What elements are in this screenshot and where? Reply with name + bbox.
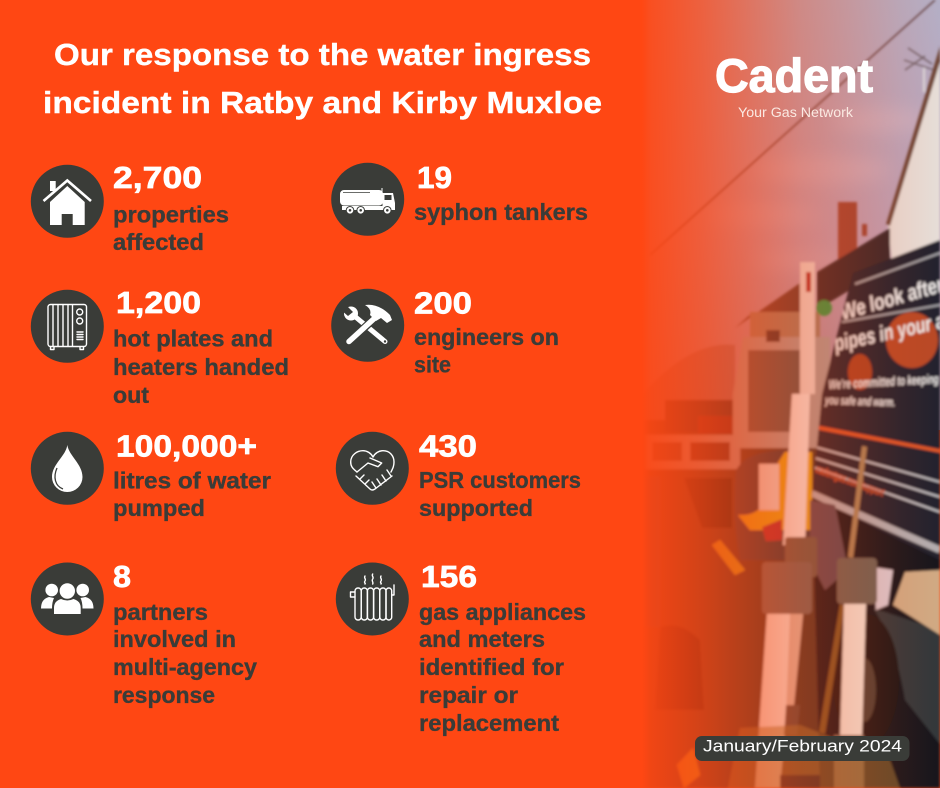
stat: hot plates and heaters: out xyxy=(113,382,149,408)
stat: syphon tankers: 19 xyxy=(417,160,452,195)
stat: gas appliances and meters: 156 xyxy=(421,559,477,594)
stat: properties affected: affected xyxy=(113,229,204,255)
logo: Cadent: Cadent xyxy=(715,49,873,102)
stat: syphon tankers xyxy=(331,160,588,236)
stat: hot plates and heaters xyxy=(31,285,289,408)
stat: litres of water pumped xyxy=(31,429,271,521)
icon: tanker lorry xyxy=(331,163,404,236)
stat: partners involved: response xyxy=(113,682,215,708)
stat: hot plates and heaters: heaters handed xyxy=(113,354,289,380)
stat: engineers on site: site xyxy=(414,352,451,378)
stat: engineers on site: engineers on xyxy=(414,324,559,350)
stat: gas appliances and meters: and meters xyxy=(419,626,545,652)
stat: litres of water pumped: 100,000+ xyxy=(116,429,257,464)
van lettering: cadentgas.com/support xyxy=(814,464,886,500)
stat: partners involved: involved in xyxy=(113,626,236,652)
stat: gas appliances and meters: gas appliances xyxy=(419,599,586,625)
stat: litres of water pumped: litres of water xyxy=(113,467,271,493)
van body xyxy=(814,499,940,788)
photo: gas network van and excavation works xyxy=(642,0,940,788)
stat: hot plates and heaters: 1,200 xyxy=(116,285,201,320)
date badge xyxy=(695,736,910,761)
stat: partners involved: multi-agency xyxy=(113,654,257,680)
stat: syphon tankers: syphon tankers xyxy=(414,199,588,225)
stat: gas appliances and meters: identified for xyxy=(419,654,564,680)
stat: PSR customers supported: supported xyxy=(419,495,533,521)
title xyxy=(43,37,602,120)
stat: properties affected: 2,700 xyxy=(113,160,202,195)
stat: PSR customers supported: PSR customers xyxy=(419,467,581,493)
stat: partners involved xyxy=(31,559,257,708)
logo: Cadent: Your Gas Network xyxy=(738,105,853,120)
stat: PSR customers supported xyxy=(336,429,581,521)
icon: hammer and spanner xyxy=(331,289,404,362)
icon: radiator xyxy=(336,562,409,636)
stat: gas appliances and meters: replacement xyxy=(419,710,559,736)
stat: partners involved: partners xyxy=(113,599,208,625)
title: incident in Ratby and Kirby Muxloe xyxy=(43,85,602,120)
stat: hot plates and heaters: hot plates and xyxy=(113,326,273,352)
stat: litres of water pumped: pumped xyxy=(113,495,205,521)
stat: properties affected xyxy=(31,160,229,255)
title: Our response to the water ingress xyxy=(54,37,591,72)
icon: water drop xyxy=(31,432,104,505)
van lettering: you safe and warm. xyxy=(824,393,895,409)
stat: partners involved: 8 xyxy=(113,559,131,594)
van lettering xyxy=(814,271,940,500)
stat: gas appliances and meters xyxy=(336,559,586,736)
ground xyxy=(642,420,822,788)
icon: house xyxy=(31,165,104,238)
date badge: January/February 2024 xyxy=(703,736,902,756)
icon: handshake heart xyxy=(336,432,409,505)
icon: group of people xyxy=(31,562,104,636)
stat: engineers on site: 200 xyxy=(414,285,472,320)
stat: properties affected: properties xyxy=(113,202,229,228)
icon: oil heater xyxy=(31,290,104,363)
stat: gas appliances and meters: repair or xyxy=(419,682,518,708)
stat: PSR customers supported: 430 xyxy=(419,429,477,464)
stat: engineers on site xyxy=(331,285,559,378)
